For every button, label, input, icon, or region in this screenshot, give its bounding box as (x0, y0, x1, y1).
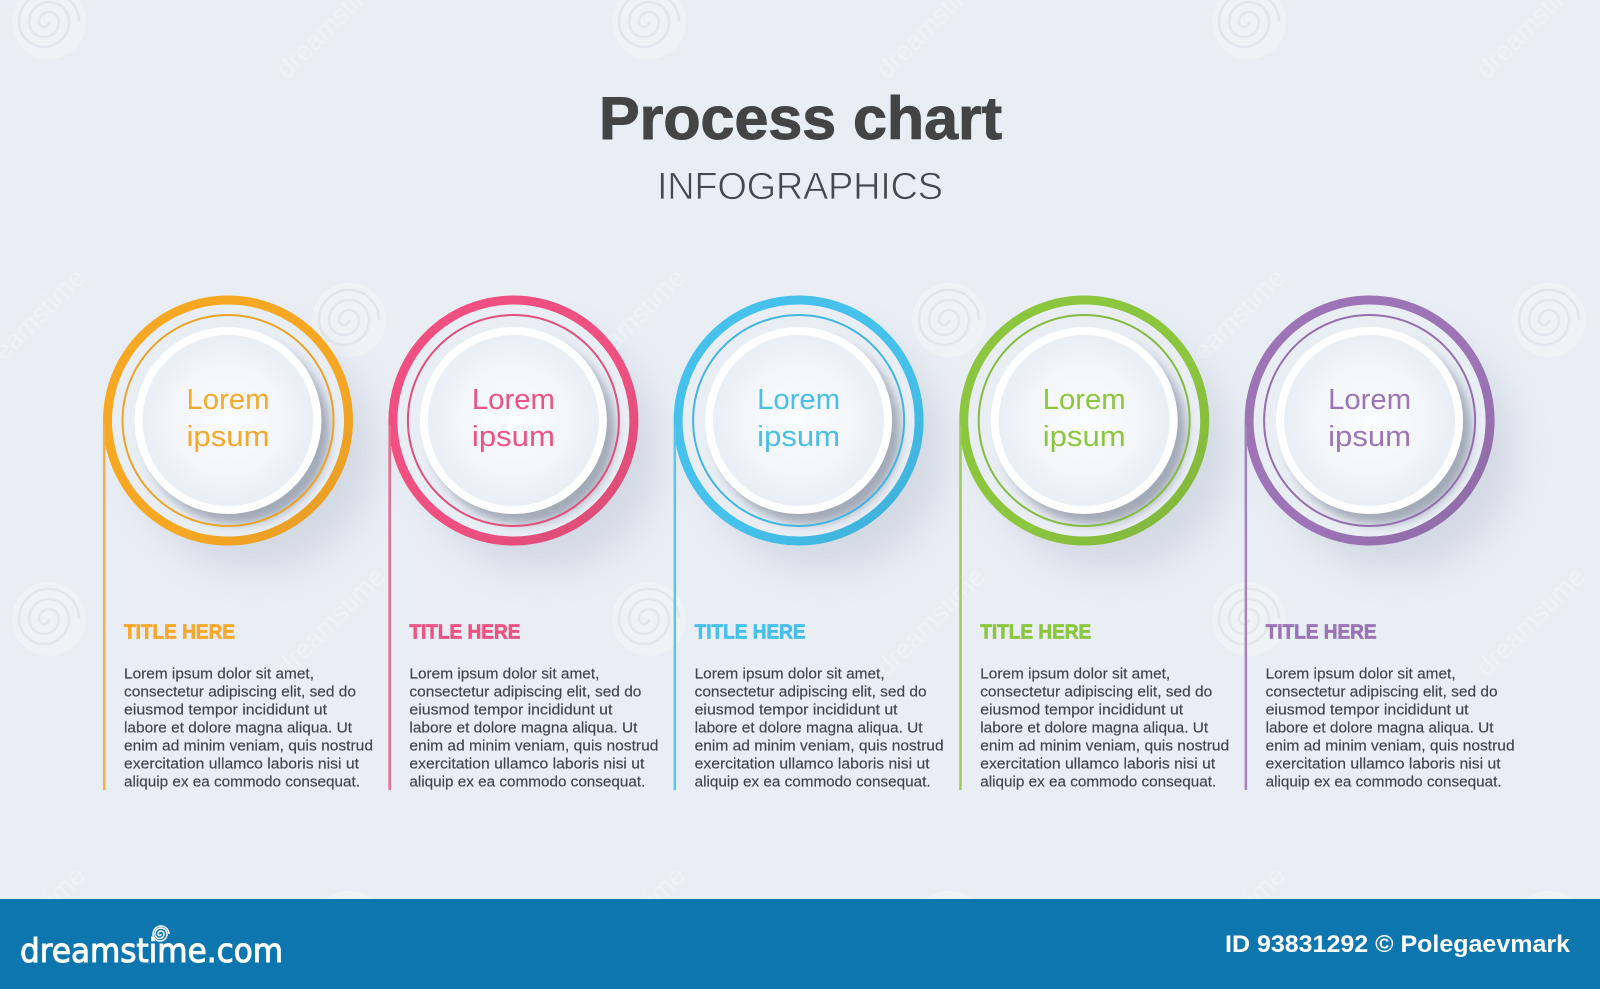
step body text: labore et dolore magna aliqua. Ut (1266, 720, 1494, 736)
step body text: consectetur adipiscing elit, sed do (695, 684, 927, 700)
step body text: Lorem ipsum dolor sit amet, (124, 666, 314, 682)
circle label (757, 384, 840, 453)
watermark layer: dreamstime (1170, 262, 1291, 383)
panel: step 4 green (959, 300, 1231, 790)
connector line (1245, 425, 1247, 790)
step body text: eiusmod tempor incididunt ut (124, 702, 327, 718)
step body text: Lorem ipsum dolor sit amet, (409, 666, 599, 682)
icon: logo spiral (153, 926, 169, 941)
footer logo: dreamstime.com (20, 931, 283, 970)
panel: step 5 purple (1245, 300, 1517, 790)
circle label: Lorem (186, 384, 270, 416)
circle label (472, 384, 555, 453)
circle badge (678, 300, 946, 572)
step body text: exercitation ullamco laboris nisi ut (409, 756, 644, 772)
connector line (103, 425, 106, 790)
watermark layer: dreamstime (1170, 860, 1291, 981)
footer credit: ID 93831292 © Polegaevmark (1225, 931, 1571, 958)
step body text: exercitation ullamco laboris nisi ut (1266, 756, 1501, 772)
step body text: consectetur adipiscing elit, sed do (980, 684, 1212, 700)
step body text (1266, 666, 1515, 790)
step body text: enim ad minim veniam, quis nostrud (409, 738, 658, 754)
circle badge (392, 300, 660, 572)
step body text: Lorem ipsum dolor sit amet, (1266, 666, 1456, 682)
circle label: ipsum (1328, 421, 1411, 453)
step body text: enim ad minim veniam, quis nostrud (124, 738, 373, 754)
step body text: labore et dolore magna aliqua. Ut (980, 720, 1208, 736)
step title: TITLE HERE (124, 622, 235, 644)
circle badge (107, 300, 375, 572)
connector line (959, 425, 962, 790)
watermark layer: dreamstime (570, 860, 691, 981)
step body text: Lorem ipsum dolor sit amet, (980, 666, 1170, 682)
step body text: aliquip ex ea commodo consequat. (124, 774, 360, 790)
circle badge (963, 300, 1231, 572)
step body text: labore et dolore magna aliqua. Ut (409, 720, 637, 736)
step title: TITLE HERE (695, 622, 806, 644)
circle label: Lorem (1328, 384, 1411, 416)
panel: step 3 blue (674, 300, 946, 790)
watermark layer: dreamstime (1470, 561, 1591, 682)
circle label: ipsum (757, 421, 840, 453)
step body text: labore et dolore magna aliqua. Ut (124, 720, 352, 736)
panel: step 1 orange (103, 300, 375, 790)
circle badge (1249, 300, 1517, 572)
circle label: ipsum (1043, 421, 1126, 453)
connector line (674, 425, 676, 790)
step body text: eiusmod tempor incididunt ut (409, 702, 612, 718)
step title: TITLE HERE (980, 622, 1091, 644)
circle label: ipsum (186, 421, 270, 453)
step body text: aliquip ex ea commodo consequat. (409, 774, 645, 790)
step body text (695, 666, 944, 790)
subtitle: INFOGRAPHICS (657, 166, 943, 208)
circle label: Lorem (472, 384, 555, 416)
step body text: exercitation ullamco laboris nisi ut (980, 756, 1215, 772)
step body text: eiusmod tempor incididunt ut (695, 702, 898, 718)
step body text: aliquip ex ea commodo consequat. (1266, 774, 1502, 790)
step body text: eiusmod tempor incididunt ut (980, 702, 1183, 718)
circle label (1328, 384, 1411, 453)
watermark layer: dreamstime (270, 561, 391, 682)
step body text: enim ad minim veniam, quis nostrud (980, 738, 1229, 754)
circle label: Lorem (1043, 384, 1126, 416)
step body text: aliquip ex ea commodo consequat. (695, 774, 931, 790)
panel: step 2 pink (388, 300, 660, 790)
step body text: Lorem ipsum dolor sit amet, (695, 666, 885, 682)
circle label: Lorem (757, 384, 840, 416)
step body text: consectetur adipiscing elit, sed do (124, 684, 356, 700)
step body text (409, 666, 658, 790)
circle label (1043, 384, 1126, 453)
step body text: enim ad minim veniam, quis nostrud (695, 738, 944, 754)
circle label (186, 384, 270, 453)
step title: TITLE HERE (1266, 622, 1377, 644)
step body text (980, 666, 1229, 790)
step body text: enim ad minim veniam, quis nostrud (1266, 738, 1515, 754)
connector line (388, 425, 391, 790)
step body text: consectetur adipiscing elit, sed do (1266, 684, 1498, 700)
step body text: exercitation ullamco laboris nisi ut (124, 756, 359, 772)
watermark layer: dreamstime (870, 561, 991, 682)
step title: TITLE HERE (409, 622, 520, 644)
step body text (124, 666, 373, 790)
watermark layer: dreamstime (570, 262, 691, 383)
footer bar (0, 899, 1600, 989)
step body text: aliquip ex ea commodo consequat. (980, 774, 1216, 790)
step body text: exercitation ullamco laboris nisi ut (695, 756, 930, 772)
title: Process chart (599, 85, 1002, 152)
step body text: eiusmod tempor incididunt ut (1266, 702, 1469, 718)
step body text: labore et dolore magna aliqua. Ut (695, 720, 923, 736)
step body text: consectetur adipiscing elit, sed do (409, 684, 641, 700)
circle label: ipsum (472, 421, 555, 453)
